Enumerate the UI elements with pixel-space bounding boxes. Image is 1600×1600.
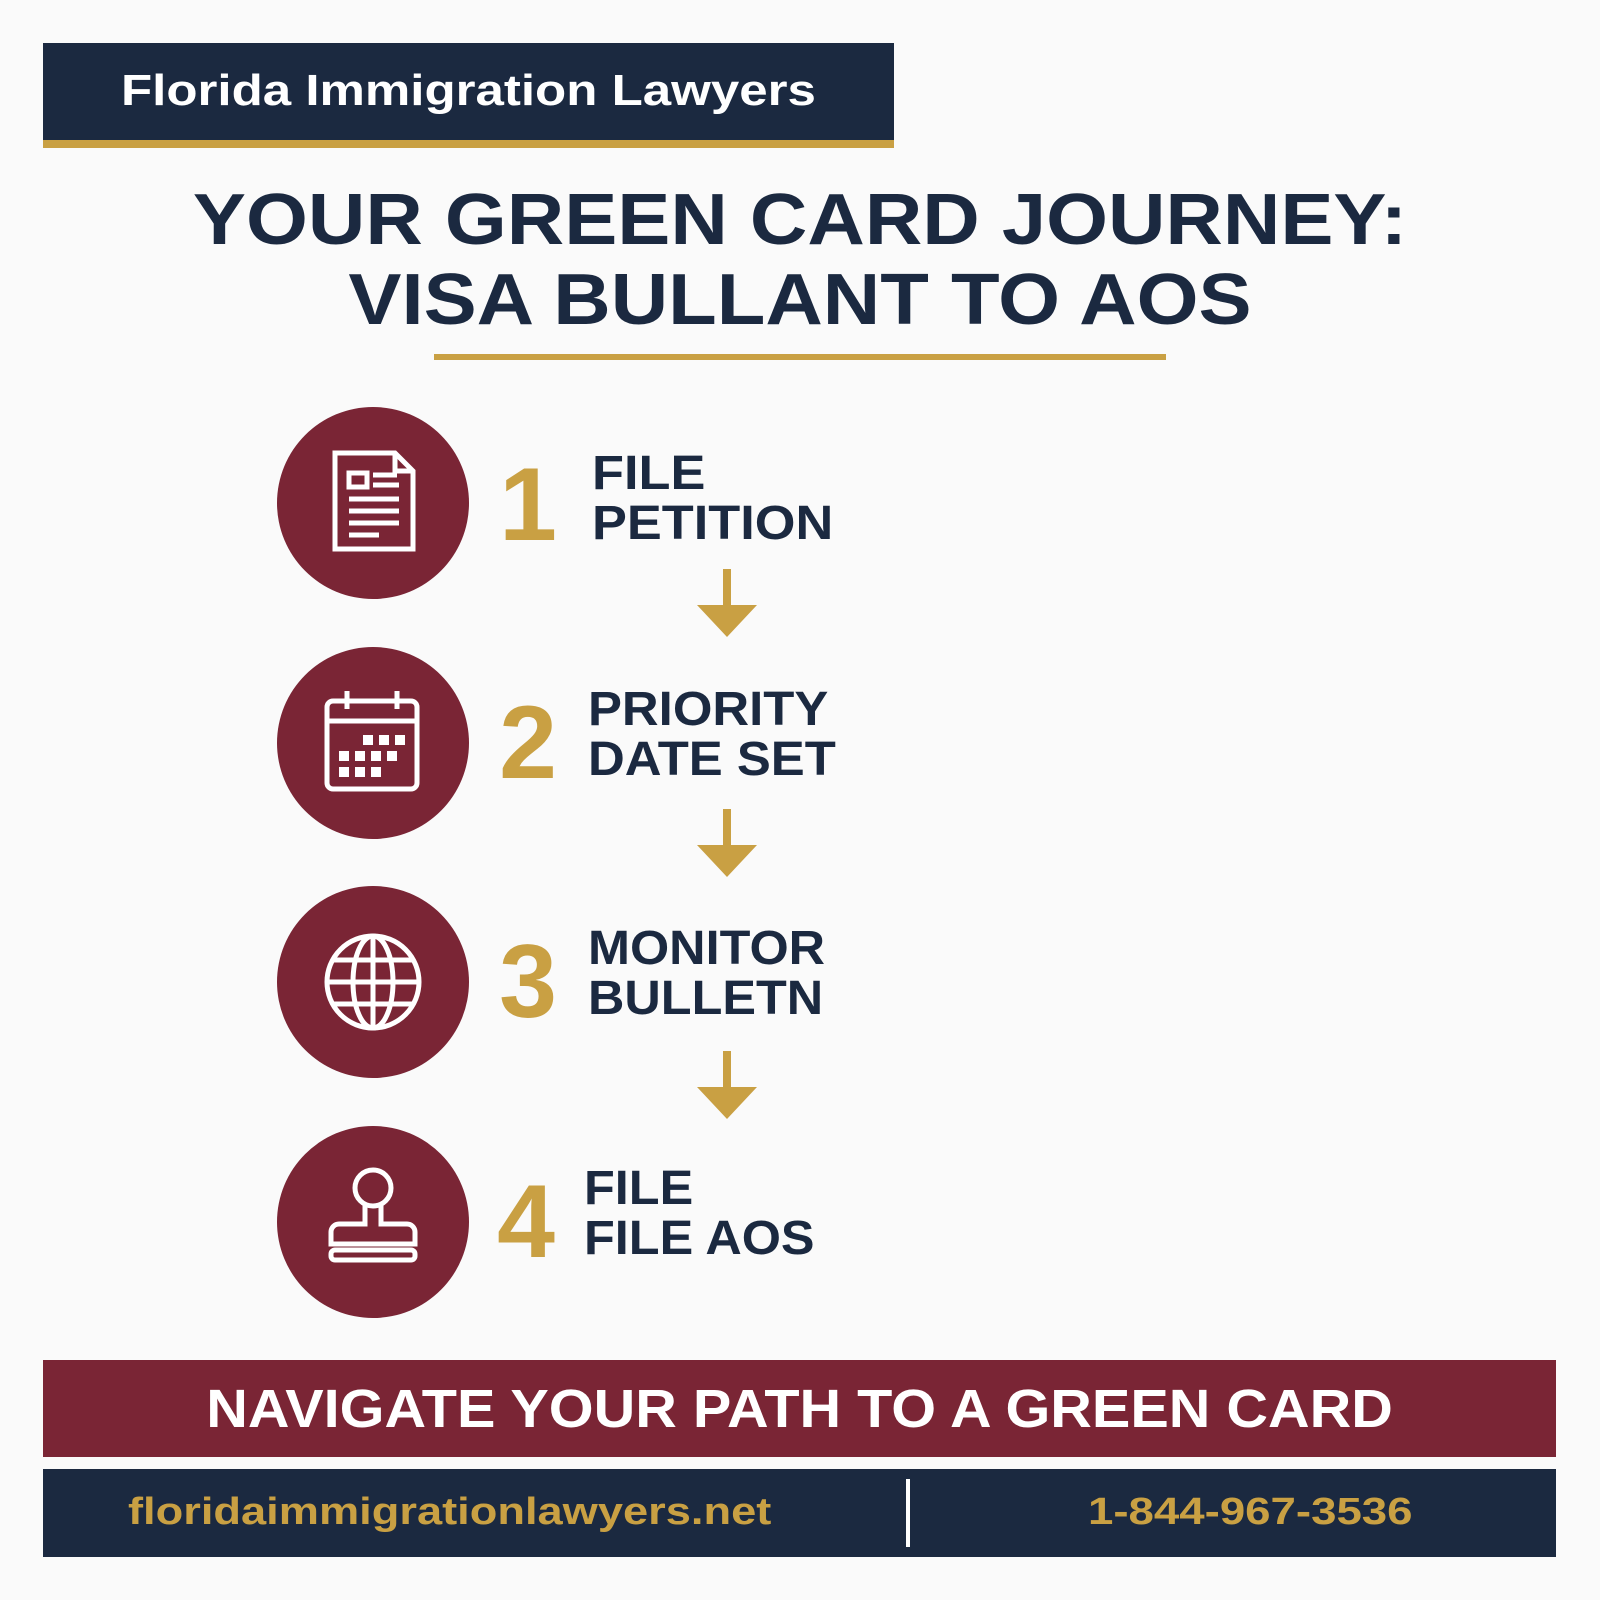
website: floridaimmigrationlawyers.net	[128, 1491, 771, 1533]
number 2: 2	[499, 685, 557, 801]
step text: DATE SET	[588, 733, 836, 786]
icon: calendar	[277, 647, 469, 839]
title	[193, 180, 1407, 340]
icon: stamp	[277, 1126, 469, 1318]
step text: PETITION	[592, 497, 833, 550]
step text	[588, 922, 825, 1025]
divider	[906, 1479, 910, 1547]
phone: 1-844-967-3536	[1088, 1491, 1413, 1533]
icon: document	[277, 407, 469, 599]
arrow	[697, 569, 757, 637]
footer	[43, 1469, 1556, 1557]
number 3: 3	[499, 924, 557, 1040]
banner	[43, 1360, 1556, 1457]
step text: FILE	[592, 447, 705, 500]
number 4: 4	[497, 1164, 555, 1280]
step 3	[277, 886, 825, 1078]
header bar	[43, 43, 894, 148]
title: YOUR GREEN CARD JOURNEY:	[193, 180, 1407, 260]
step text	[584, 1162, 815, 1265]
title: VISA BULLANT TO AOS	[348, 260, 1252, 340]
arrow	[697, 809, 757, 877]
step text	[588, 683, 836, 786]
step 2	[277, 647, 836, 839]
step 1	[277, 407, 833, 599]
step text: BULLETN	[588, 972, 823, 1025]
step text: FILE AOS	[584, 1212, 815, 1265]
header text: Florida Immigration Lawyers	[121, 66, 816, 115]
title underline	[434, 354, 1166, 360]
arrow	[697, 1051, 757, 1119]
banner text: NAVIGATE YOUR PATH TO A GREEN CARD	[206, 1379, 1393, 1439]
icon: globe	[277, 886, 469, 1078]
step text: FILE	[584, 1162, 693, 1215]
step text: MONITOR	[588, 922, 825, 975]
step 4	[277, 1126, 815, 1318]
step text: PRIORITY	[588, 683, 828, 736]
step text	[592, 447, 833, 550]
number 1: 1	[499, 447, 557, 563]
